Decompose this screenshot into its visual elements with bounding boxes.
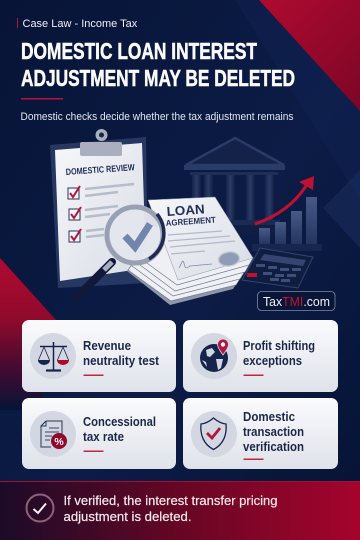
illustration: courthouse <box>180 138 285 235</box>
red corner: top right <box>259 0 360 111</box>
card: domestic transaction verification <box>183 398 338 469</box>
icon: shield with check <box>191 411 237 457</box>
footer banner: adjustment is deleted. <box>64 509 192 524</box>
illustration: bar chart with arrow <box>252 176 322 251</box>
signature <box>179 261 212 268</box>
eyebrow: case law label: Case Law - Income Tax <box>22 18 138 30</box>
clipboard heading: DOMESTIC REVIEW <box>65 162 135 177</box>
card: revenue neutrality test: neutrality test <box>83 353 160 368</box>
icon: document with percent <box>30 411 76 457</box>
checklist <box>68 184 134 242</box>
seal <box>218 251 240 267</box>
conclusion text: If verified, the interest transfer pricing <box>64 493 278 508</box>
footer banner <box>0 481 360 540</box>
title <box>21 38 295 91</box>
card text: Concessional <box>83 414 156 429</box>
card: domestic transaction verification: transaction <box>243 424 304 439</box>
illustration: calculator <box>242 248 313 288</box>
icon: document with percent: % <box>54 436 64 448</box>
TaxTMI badge <box>258 292 335 310</box>
card: domestic transaction verification: verification <box>243 439 304 454</box>
card text: Revenue <box>83 338 131 353</box>
subtitle: Domestic checks decide whether the tax adjustment remains <box>20 111 294 123</box>
clipboard clip <box>80 129 122 156</box>
illustration: magnifying glass <box>75 207 164 299</box>
red corner: left <box>0 258 56 410</box>
illustration: loan agreement stack: AGREEMENT <box>165 214 217 228</box>
TaxTMI badge: TaxTMI.com <box>263 295 330 309</box>
icon: check circle <box>26 494 54 522</box>
icon: scales <box>30 333 76 379</box>
card text: Domestic <box>243 409 295 424</box>
illustration: loan agreement stack <box>127 197 253 305</box>
card: concessional tax rate: tax rate <box>83 429 124 444</box>
card: profit shifting exceptions: exceptions <box>243 353 302 368</box>
card text: Profit shifting <box>243 338 315 353</box>
title underline <box>21 98 63 100</box>
title: DOMESTIC LOAN INTEREST <box>21 38 257 64</box>
icon: globe with pin <box>191 333 237 379</box>
illustration: clipboard <box>50 129 148 288</box>
card: revenue neutrality test <box>22 320 176 392</box>
loan agreement heading: LOAN <box>166 201 205 219</box>
card: profit shifting exceptions <box>183 320 338 392</box>
card: concessional tax rate <box>22 398 176 469</box>
